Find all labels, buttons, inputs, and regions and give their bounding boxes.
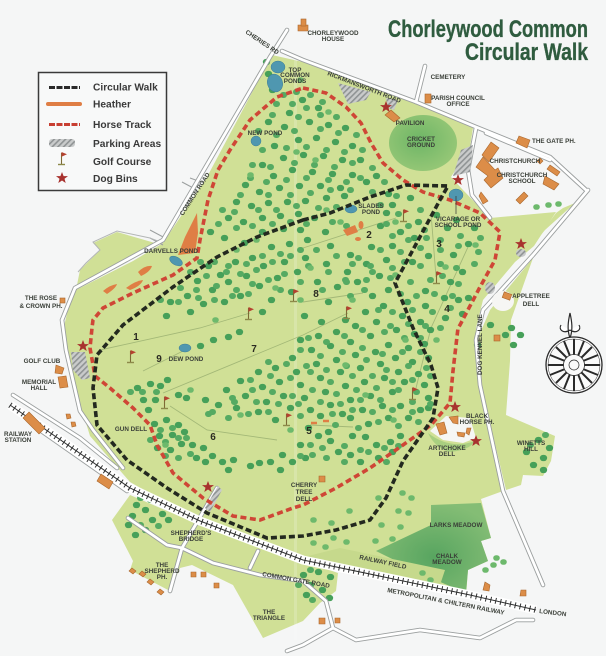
place labels: APPLETREE — [512, 293, 550, 300]
place labels: CHRISTCHURCH — [497, 172, 548, 179]
cricket ground: GROUND — [407, 142, 435, 149]
horse track — [90, 88, 500, 520]
larks and chalk meadows: CHALK — [436, 553, 458, 560]
place labels: PH. — [157, 574, 167, 581]
legend: heather: Heather — [93, 100, 131, 110]
place labels: SHEPHERD — [144, 568, 180, 575]
place labels: PONDS — [284, 78, 306, 85]
woodland trees — [128, 62, 559, 600]
place labels: OFFICE — [446, 101, 470, 108]
place labels: TOP — [289, 67, 301, 74]
golf fairways — [100, 213, 468, 440]
place labels: STATION — [5, 437, 32, 444]
hole numbers: 3 — [436, 239, 442, 250]
place labels: ARTICHOKE — [428, 445, 466, 452]
place labels: MEMORIAL — [22, 379, 56, 386]
hole numbers: 2 — [366, 230, 372, 241]
place labels: DELL — [439, 451, 455, 458]
black horse and artichoke dell — [428, 291, 514, 452]
golf course flags — [127, 209, 442, 426]
place labels: & CROWN PH. — [19, 303, 63, 310]
place labels: THE ROSE — [25, 295, 57, 302]
hole numbers: 9 — [156, 354, 162, 365]
hole numbers: 6 — [210, 432, 216, 443]
place labels: METROPOLITAN & CHILTERN RAILWAY — [387, 587, 506, 617]
place labels: GOLF CLUB — [24, 358, 61, 365]
hole numbers: 8 — [313, 289, 319, 300]
place labels: SLADES — [358, 203, 384, 210]
railway line — [10, 405, 536, 610]
place labels: CEMETERY — [431, 74, 466, 81]
hole numbers — [133, 230, 450, 443]
map: green common land — [62, 55, 575, 638]
railway field: RAILWAY FIELD — [359, 554, 407, 571]
hole numbers: 4 — [444, 304, 450, 315]
place labels: HOUSE — [322, 36, 344, 43]
hole numbers: 7 — [251, 344, 257, 355]
legend: circular walk: Circular Walk — [93, 82, 158, 94]
dog bins — [77, 101, 527, 492]
place labels: SHEPHERD'S — [171, 530, 211, 537]
place labels: RICKMANSWORTH ROAD — [326, 70, 402, 105]
place labels: HILL — [524, 446, 538, 453]
place labels: PARISH COUNCIL — [431, 95, 485, 102]
fold line — [294, 60, 297, 640]
place labels: BRIDGE — [179, 536, 203, 543]
legend: golf course: Golf Course — [93, 157, 152, 168]
place labels: BLACK — [466, 413, 488, 420]
place labels: SCHOOL POND — [435, 222, 482, 229]
place labels: DEW POND — [169, 356, 204, 363]
place labels: CHERIES RD — [244, 29, 280, 57]
place labels: COMMON — [280, 72, 310, 79]
place labels: WINETTS — [517, 440, 545, 447]
place labels: CHORLEYWOOD — [307, 30, 359, 37]
legend: parking areas: Parking Areas — [93, 139, 161, 150]
place labels: HORSE PH. — [460, 419, 495, 426]
legend: horse track: Horse Track — [93, 120, 152, 131]
place labels: THE GATE PH. — [532, 138, 576, 145]
title — [388, 16, 589, 66]
cricket ground: CRICKET — [407, 136, 435, 143]
place labels: HALL — [31, 385, 48, 392]
parking areas — [71, 83, 526, 512]
larks and chalk meadows: LARKS MEADOW — [430, 522, 482, 529]
place labels: DOG KENNEL LANE — [477, 314, 484, 375]
place labels: GUN DELL — [115, 426, 147, 433]
place labels: LONDON — [539, 608, 567, 618]
hole numbers: 1 — [133, 332, 139, 343]
legend — [38, 72, 166, 190]
place labels: THE — [263, 609, 275, 616]
heather patches — [103, 213, 364, 423]
place labels: VICARAGE OR — [436, 216, 481, 223]
ponds — [168, 61, 463, 352]
place labels: TREE — [296, 489, 312, 496]
larks and chalk meadows — [376, 503, 491, 593]
railway field — [300, 548, 445, 585]
cricket ground — [389, 115, 457, 171]
place labels: TRIANGLE — [253, 615, 285, 622]
place labels: COMMON ROAD — [179, 171, 212, 217]
compass rose — [546, 313, 602, 393]
place labels: DARVELLS POND — [144, 248, 198, 255]
place labels: THE — [156, 562, 168, 569]
place labels: CHERRY — [291, 482, 318, 489]
place labels: SCHOOL — [509, 178, 536, 185]
hole numbers: 5 — [306, 426, 312, 437]
place labels: CHRISTCHURCH — [490, 158, 541, 165]
place labels: COMMON GATE ROAD — [262, 571, 331, 590]
place labels: DELL — [523, 301, 539, 308]
larks and chalk meadows: MEADOW — [432, 559, 462, 566]
place labels: NEW POND — [248, 130, 283, 137]
place labels: RAILWAY — [4, 431, 33, 438]
legend: dog bins: Dog Bins — [93, 174, 138, 185]
place labels: DELL — [296, 496, 312, 503]
place labels: POND — [362, 209, 381, 216]
place labels: PAVILION — [396, 120, 425, 127]
circular walk — [93, 185, 448, 538]
